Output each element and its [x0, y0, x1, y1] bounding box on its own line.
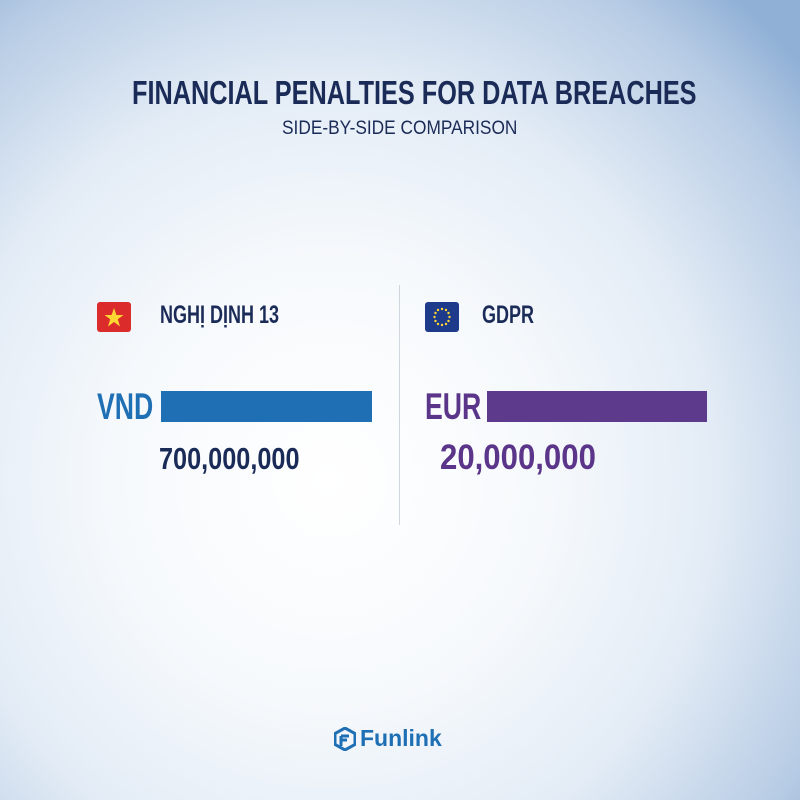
bar EUR [487, 391, 707, 422]
bar VND [161, 391, 372, 422]
icon: logo mark [334, 727, 356, 751]
subtitle: SIDE-BY-SIDE COMPARISON [282, 118, 517, 139]
icon: vietnam flag [97, 302, 131, 332]
value VND: 700,000,000 [159, 441, 300, 476]
currency EUR: EUR [425, 386, 481, 427]
panel: EU [425, 301, 707, 477]
text: Funlink: Funlink [360, 725, 442, 751]
logo: Funlink [334, 725, 442, 751]
value EUR: 20,000,000 [440, 438, 596, 477]
label: Nghi dinh 13: NGHỊ DỊNH 13 [160, 301, 279, 329]
icon: EU flag [425, 302, 459, 332]
currency VND: VND [97, 386, 153, 427]
title: FINANCIAL PENALTIES FOR DATA BREACHES [132, 74, 697, 111]
panel: Vietnam [97, 301, 372, 476]
label: GDPR: GDPR [482, 301, 534, 329]
divider [399, 285, 400, 525]
